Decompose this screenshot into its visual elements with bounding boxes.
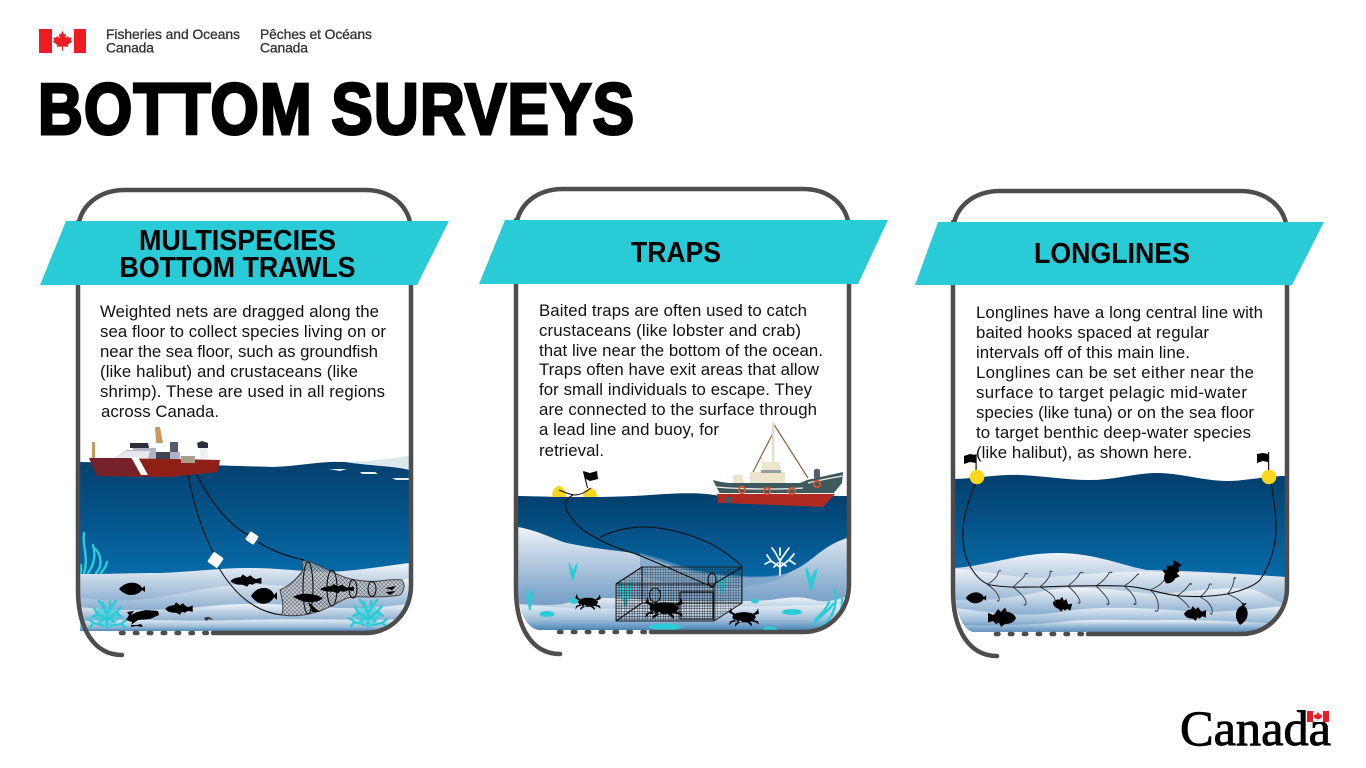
float 1 <box>207 552 224 568</box>
shrimp <box>204 617 213 621</box>
fishing boat <box>713 422 843 507</box>
body text: surface to target pelagic mid-water <box>976 383 1247 402</box>
buoy 1 <box>552 486 566 497</box>
icon: wordmark flag <box>1306 710 1330 722</box>
lobster <box>126 610 159 627</box>
seaweeds <box>526 562 818 610</box>
white coral <box>765 548 795 575</box>
cod 2 <box>165 602 193 615</box>
crab right <box>729 608 759 626</box>
sea floor layers <box>80 563 409 600</box>
heading: TRAPS <box>631 237 721 269</box>
sea floor layers <box>955 553 1285 633</box>
frame outline <box>516 189 849 654</box>
body text: sea floor to collect species living on or <box>100 322 386 341</box>
body text: Longlines have a long central line with <box>976 303 1263 322</box>
body text: intervals off of this main line. <box>976 343 1190 362</box>
illustration: trawl scene <box>80 427 409 633</box>
french department name: Pêches et Océans <box>260 26 372 42</box>
seaweed <box>81 533 107 573</box>
icon: Canadian flag <box>39 29 86 53</box>
main line <box>963 483 1276 597</box>
crab left <box>575 594 601 610</box>
trawl net <box>280 560 404 616</box>
body text: crustaceans (like lobster and crab) <box>539 321 801 340</box>
banner <box>479 220 888 284</box>
water <box>955 473 1285 578</box>
body text: Baited traps are often used to catch <box>539 301 807 320</box>
english department name: Canada <box>106 40 154 56</box>
fish on floor <box>966 558 1250 627</box>
cod 1 <box>231 574 261 587</box>
trap <box>616 567 742 621</box>
Canada wordmark: Canada <box>1180 700 1331 756</box>
buoy connector <box>559 488 591 495</box>
banner <box>915 222 1324 285</box>
body text: Weighted nets are dragged along the <box>100 302 379 321</box>
body text: are connected to the surface through <box>539 400 817 419</box>
government signature: Fisheries and Oceans Canada <box>39 26 372 56</box>
flatfish 1 <box>119 583 145 595</box>
heading: BOTTOM TRAWLS <box>120 252 356 284</box>
teal algae blobs <box>540 598 802 632</box>
body text: species (like tuna) or on the sea floor <box>976 403 1254 422</box>
tow line 1 <box>188 475 282 615</box>
body text: shrimp). These are used in all regions <box>100 382 385 401</box>
frame outline <box>78 190 411 655</box>
title: BOTTOM SURVEYS <box>38 69 634 150</box>
lead line <box>565 495 713 587</box>
body text: Longlines can be set either near the <box>976 363 1254 382</box>
body text: to target benthic deep-water species <box>976 423 1251 442</box>
coral left <box>88 601 126 628</box>
body text: for small individuals to escape. They <box>539 380 813 399</box>
body text: baited hooks spaced at regular <box>976 323 1209 342</box>
crab large <box>645 597 683 619</box>
heading: MULTISPECIES <box>139 225 336 257</box>
english department name: Fisheries and Oceans <box>106 26 240 42</box>
body text: a lead line and buoy, for <box>539 420 719 439</box>
frame outline <box>953 191 1287 656</box>
buoy left with flag <box>964 454 984 484</box>
sea floor layers <box>518 527 847 633</box>
body text: (like halibut) and crustaceans (like <box>100 362 358 381</box>
buoy right with flag <box>1257 452 1276 484</box>
body text: across Canada. <box>101 402 219 421</box>
buoy 2 <box>583 488 597 497</box>
heading: LONGLINES <box>1034 238 1190 270</box>
panel: longlines <box>915 191 1324 656</box>
distant ice <box>345 456 409 470</box>
body text: Traps often have exit areas that allow <box>539 360 820 379</box>
illustration: trap scene <box>518 422 847 633</box>
hooks <box>987 571 1245 614</box>
water <box>518 493 847 582</box>
body text: that live near the bottom of the ocean. <box>539 341 823 360</box>
flatfish 2 <box>251 588 277 604</box>
coast guard ship <box>89 427 220 477</box>
panel: traps <box>479 189 888 654</box>
buoy bridle arc <box>600 527 742 566</box>
coral right <box>349 600 387 627</box>
tow line 2 <box>197 475 304 560</box>
panel: multispecies bottom trawls <box>40 190 449 655</box>
float 2 <box>246 532 258 544</box>
body text: near the sea floor, such as groundfish <box>100 342 378 361</box>
french department name: Canada <box>260 40 308 56</box>
illustration: longline scene <box>955 473 1285 633</box>
banner <box>40 221 449 285</box>
water <box>80 458 409 576</box>
body text: retrieval. <box>539 441 604 460</box>
buoy flag <box>583 471 598 488</box>
bottom right seaweed <box>813 590 842 628</box>
body text: (like halibut), as shown here. <box>976 443 1192 462</box>
